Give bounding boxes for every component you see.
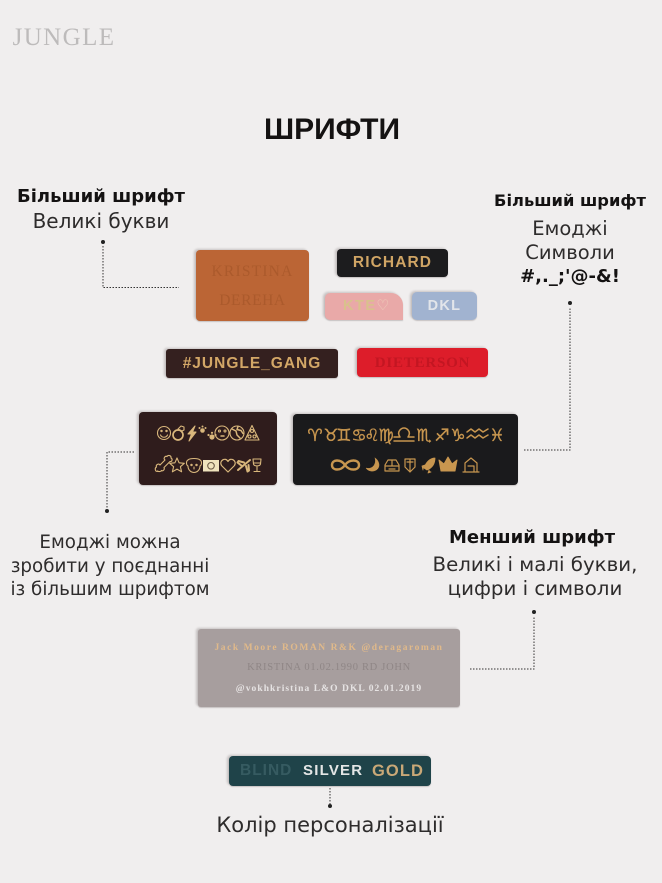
patch: red DIETERSON: DIETERSON <box>375 355 470 371</box>
patch: orange KRISTINA DEREHA <box>196 250 309 321</box>
patch: grey small text: KRISTINA 01.02.1990 RD JOHN <box>247 662 411 673</box>
zodiac row: ♏︎ <box>416 426 432 446</box>
emoji row one <box>158 426 259 441</box>
connector dot: emoji <box>105 509 109 513</box>
text block: larger font, capitals: Великі букви <box>33 209 169 233</box>
text block: larger font, capitals <box>17 186 185 233</box>
zodiac row: ♍︎ <box>378 426 394 446</box>
text block: smaller font: Великі і малі букви, <box>433 553 637 576</box>
zodiac row: ♉︎ <box>323 426 339 446</box>
text block: emoji note: із більшим шрифтом <box>10 579 210 600</box>
zodiac row: ♊︎ <box>336 426 352 446</box>
symbols row <box>332 457 479 473</box>
logo: JUNGLE: JUNGLE <box>13 24 115 51</box>
text block: larger font, emoji and symbols: Символи <box>525 241 615 264</box>
text block: personalisation colour: Колір персоналізації <box>216 813 444 837</box>
patch: teal BLIND SILVER GOLD: GOLD <box>372 762 424 780</box>
zodiac row: ♋︎ <box>351 426 367 446</box>
text block: larger font, emoji and symbols: Емоджі <box>532 217 608 240</box>
zodiac row: ♌︎ <box>364 426 380 446</box>
zodiac row: ♐︎ <box>434 426 450 446</box>
patch: orange KRISTINA DEREHA: KRISTINA <box>212 263 293 280</box>
patch: pink KTE <box>325 293 403 320</box>
text block: smaller font: цифри і символи <box>448 577 622 600</box>
title: ШРИФТИ <box>264 113 400 146</box>
text block: smaller font: Менший шрифт <box>449 527 615 548</box>
patch: brown #JUNGLE_GANG <box>166 349 338 378</box>
zodiac row: ♑︎ <box>450 426 466 446</box>
patch: blue DKL <box>412 292 477 320</box>
text block: larger font, emoji and symbols: Більший шрифт <box>494 191 646 210</box>
patch: black RICHARD: RICHARD <box>353 254 432 271</box>
text block: larger font, capitals: Більший шрифт <box>17 186 185 207</box>
connector dot: capitals <box>101 240 105 244</box>
zodiac row: ♈︎ <box>307 426 323 446</box>
patch: black RICHARD <box>337 249 448 277</box>
text block: larger font, emoji and symbols: #,._;'@-&! <box>520 266 620 287</box>
connector dot: symbols <box>568 301 572 305</box>
text block: emoji note: зробити у поєднанні <box>11 556 209 577</box>
connector dot: colour <box>328 804 332 808</box>
text block: smaller font <box>433 527 637 600</box>
patch: red DIETERSON <box>357 348 488 377</box>
patch: blue DKL: DKL <box>428 298 461 314</box>
zodiac row <box>307 426 505 446</box>
patch: black zodiac background <box>293 414 518 485</box>
text block: larger font, emoji and symbols <box>494 191 646 287</box>
emoji row two <box>155 455 261 472</box>
text block: emoji note: Емоджі можна <box>39 532 181 553</box>
patch: grey small text <box>198 629 460 707</box>
patch: teal BLIND SILVER GOLD: BLIND <box>240 762 292 779</box>
patch: pink KTE: KTE♡ <box>343 298 391 314</box>
patch: brown emoji background <box>139 412 277 485</box>
patch: orange KRISTINA DEREHA: DEREHA <box>219 292 286 309</box>
patch: teal BLIND SILVER GOLD <box>229 756 431 786</box>
zodiac row: ♓︎ <box>489 426 505 446</box>
connector dot: smaller font <box>532 610 536 614</box>
patch: teal BLIND SILVER GOLD: SILVER <box>303 762 363 779</box>
patch: grey small text: @vokhkristina L&O DKL 02.01.2019 <box>236 684 422 694</box>
text block: emoji note <box>10 532 210 600</box>
patch: grey small text: Jack Moore ROMAN R&K @deragaroman <box>214 643 444 653</box>
patch: brown #JUNGLE_GANG: #JUNGLE_GANG <box>183 355 321 372</box>
